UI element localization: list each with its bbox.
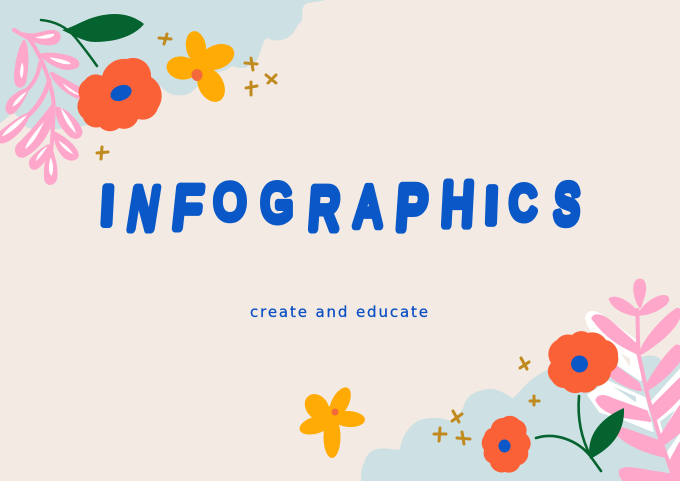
stems (536, 396, 601, 471)
fern white highlights (2, 34, 80, 176)
flower centre blue (498, 440, 510, 452)
flower centre blue (571, 356, 588, 372)
fern white outlines (586, 312, 680, 463)
flower: top-left red (77, 58, 162, 131)
flower centre orange (192, 69, 202, 81)
blob: bottom-right pale blue (361, 355, 680, 481)
flower: bottom-right large red (548, 331, 618, 393)
flower: top yellow (165, 30, 238, 107)
title: I (99, 175, 116, 235)
title: I (484, 177, 500, 234)
plant: bottom-right pink fern (586, 280, 680, 481)
flower centre orange (332, 408, 338, 416)
title: N (124, 175, 163, 242)
title: C (510, 177, 536, 230)
flower: bottom small red (482, 416, 531, 473)
title (99, 171, 581, 243)
title: H (440, 171, 475, 239)
petals (482, 416, 531, 473)
title: P (394, 173, 430, 243)
sparkles: top-left gold (97, 34, 276, 159)
fern stems (14, 30, 54, 177)
leaf blade (62, 14, 144, 42)
sparkles: bottom-right gold (434, 358, 539, 444)
leaf blade (589, 408, 624, 459)
fern fronds (0, 32, 85, 183)
plant: bottom-right green stem and leaf (536, 396, 624, 471)
leaf: top-left green (41, 14, 144, 66)
flower centre blue (108, 82, 134, 104)
subtitle: create and educate (250, 303, 428, 321)
title: R (307, 175, 342, 242)
fern fronds (593, 280, 680, 481)
title: S (553, 174, 581, 235)
petals (77, 58, 162, 131)
leaf stem (41, 20, 97, 66)
title: A (354, 176, 383, 239)
title: G (261, 173, 293, 232)
plant: top-left pink fern (0, 30, 85, 183)
petals (548, 331, 618, 393)
flower: bottom yellow (297, 384, 365, 458)
fern beige gap (621, 353, 630, 367)
title: F (170, 176, 205, 241)
fern pale blue gaps (613, 387, 675, 432)
title: O (214, 174, 246, 230)
fern main stem (637, 308, 675, 481)
blob: top-left pale blue (0, 0, 325, 130)
